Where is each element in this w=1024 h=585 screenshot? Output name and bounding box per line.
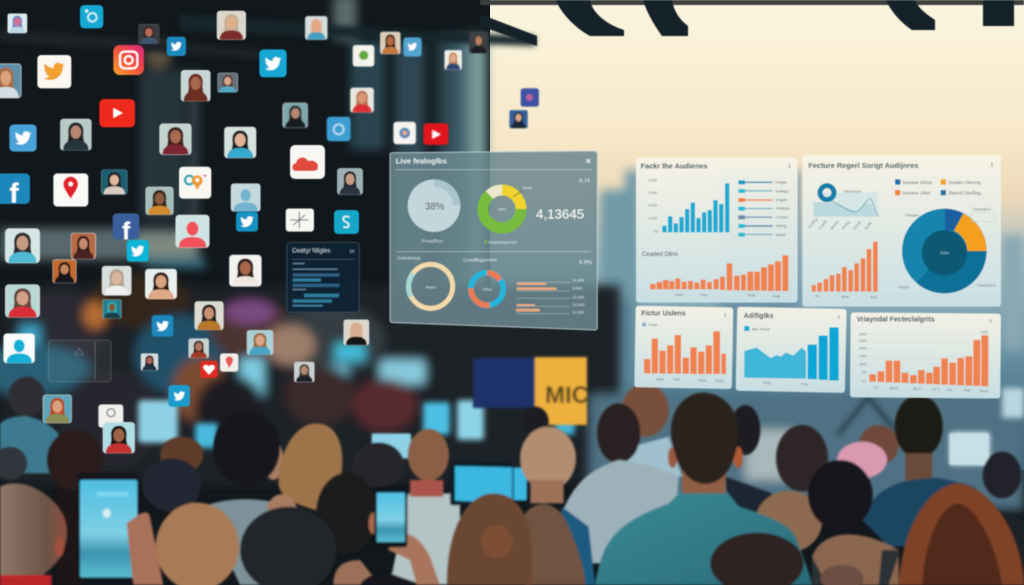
icon: facebook: f	[9, 178, 19, 209]
heading: Fecture Regerl Sorigt Audijnres	[808, 161, 918, 170]
subheading: Ceaded Dlins	[642, 252, 678, 258]
legend: Deestce Lihter	[903, 191, 931, 196]
avatar: white portrait	[229, 255, 261, 286]
panel: regional forecast: Bk 4	[913, 387, 921, 391]
panel: dark small table: Cealty/ Nligles	[292, 249, 330, 255]
icon: twitter blurred	[152, 315, 173, 337]
chart: green yellow donut	[483, 185, 532, 244]
icon: person red	[176, 215, 209, 248]
panel: social audiences: Po	[815, 294, 820, 298]
chart: area and ring: Sreffng	[808, 217, 818, 229]
panel: future users	[634, 306, 733, 389]
panel: regional forecast: 0m	[862, 371, 867, 375]
chart: blue bars	[648, 179, 729, 234]
panel: social audiences: 1	[990, 163, 993, 169]
avatar: red haired woman	[43, 395, 72, 423]
avatar: woman orange top	[146, 187, 173, 215]
avatar: orange haired	[247, 330, 273, 355]
legend: Ungde	[776, 180, 786, 184]
chart: horizontal bars: 12,001	[572, 294, 585, 299]
panel: future users: Pap	[673, 378, 680, 382]
panel: regional forecast: 4000	[859, 363, 867, 367]
avatar: orange portrait	[380, 32, 400, 54]
avatar: grey lab coat	[102, 266, 131, 295]
billboard sign in crowd: MIC	[545, 382, 589, 409]
legend: Ungoly	[776, 198, 787, 202]
panel: audience charts: Dsrls	[675, 293, 683, 297]
chart: pie donut: Data	[940, 250, 950, 255]
foreground crowd, left half	[0, 377, 532, 585]
legend	[738, 180, 790, 237]
panel: audience charts: Trap	[700, 293, 707, 297]
chart: horizontal bars: 12,001	[572, 310, 585, 315]
avatar: grey jacket	[337, 168, 363, 195]
avatar: woman red top	[160, 124, 191, 155]
icon: twitter lower	[168, 385, 190, 407]
avatar: blue silhouette	[231, 184, 260, 211]
chart: area and ring: Coreffs	[818, 219, 828, 231]
avatar: pale blur chip	[8, 14, 27, 33]
icon: orange bird on white	[37, 55, 71, 88]
chart: area and ring: Adlerscope	[843, 190, 862, 194]
chart: pie donut: Thescoders	[977, 284, 996, 288]
chart: area and ring: Plofng	[841, 220, 851, 231]
chart: big gauge: 38%	[425, 202, 445, 213]
panel: live analytics glass: 9.9%	[579, 260, 592, 266]
avatar: dark beam portrait	[469, 32, 488, 53]
avatar: man blue top	[224, 127, 256, 158]
chart: big gauge: Preadfhce	[422, 238, 443, 243]
icon: twitter cyan	[127, 240, 149, 262]
panel: regional forecast: 0000	[859, 339, 867, 343]
panel: future users: Plass	[648, 323, 657, 327]
panel: audience insights: 2	[837, 315, 840, 320]
avatar: small woman	[218, 73, 238, 92]
heading: Live fealoglbs	[396, 157, 447, 166]
avatar: man peach shirt	[145, 269, 177, 299]
avatar: man in glasses	[60, 119, 91, 150]
chart: blue orange donut	[471, 273, 503, 305]
legend: Dlascel Clacfhng	[948, 191, 981, 196]
icon: blue swirl	[327, 117, 351, 141]
chart: pie donut: Plclcte	[899, 285, 909, 289]
avatar: salmon portrait	[305, 16, 327, 40]
chart: pie donut: Fblssyte	[905, 213, 919, 217]
avatar: woman brown	[71, 233, 96, 259]
panel: future users: 2Day	[715, 379, 724, 383]
panel: regional forecast: Bupv	[980, 389, 989, 393]
chart: horizontal bars: 12,043	[572, 302, 585, 307]
group: icons upper left	[0, 5, 287, 215]
chart: orange bars	[869, 335, 988, 386]
avatar: cropped edge portrait	[0, 64, 21, 98]
panel: future users: 1	[724, 312, 727, 317]
chart: gridlines	[868, 334, 989, 382]
panel: live analytics glass: Conlolaraup	[397, 255, 421, 260]
icon: twitter	[236, 212, 258, 232]
panel: live analytics glass: Cnedfhgysnhre	[463, 257, 497, 263]
panel: audience insights	[736, 307, 847, 393]
panel: regional forecast: 1/1	[873, 386, 878, 390]
chart: area and ring	[808, 186, 878, 231]
icon: cyan s app	[334, 210, 359, 234]
panel: regional forecast: 1%	[947, 388, 953, 392]
avatar: small blue suit	[445, 50, 462, 70]
icon: twitter	[9, 124, 37, 152]
legend: Tylong	[776, 224, 786, 228]
foreground crowd, right half	[509, 383, 1024, 585]
panel: dark small table	[287, 242, 359, 312]
chart: horizontal bars: 0,000	[572, 286, 583, 291]
legend: Unsof	[776, 233, 786, 237]
chart: cream ring: Nwso	[426, 284, 436, 289]
avatar: man in suit	[344, 320, 369, 345]
panel: faint outlined widget	[48, 340, 111, 382]
panel: future users: Bfhe	[657, 378, 664, 382]
chart: pie donut: Thacinglfon	[972, 208, 991, 212]
icon: facebook	[0, 173, 30, 209]
panel: social audiences	[802, 155, 1001, 307]
avatar: woman long hair	[181, 70, 210, 101]
heading: Fackr lhe Audienes	[641, 162, 708, 171]
avatar: red shirt	[350, 88, 374, 112]
icon: youtube	[99, 99, 135, 127]
legend: C Ends	[776, 215, 788, 219]
avatar: dark small	[141, 354, 158, 370]
icon: red heart	[200, 361, 218, 378]
avatar: woman red shirt	[5, 285, 40, 317]
chart: green yellow donut: Engalrreglssnce	[488, 239, 518, 244]
panel: regional forecast: 1/1 z	[932, 388, 940, 392]
icon: map pin	[53, 173, 88, 207]
panel: regional forecast: 7000	[859, 354, 867, 358]
chart: horizontal bars: 11,004	[572, 278, 585, 283]
icon: youtube small	[423, 123, 448, 145]
icon: white red tag	[220, 353, 238, 372]
heading: Fictur Uslens	[641, 311, 686, 318]
chart: blue bars: 1.000	[648, 191, 657, 195]
billboard sign in crowd	[473, 357, 589, 425]
avatar: teal square portrait	[101, 170, 127, 194]
panel: regional forecast: 3750	[981, 330, 988, 334]
right dashboards	[634, 155, 1001, 399]
avatar: red dress	[189, 339, 209, 358]
avatar: dark portrait	[139, 24, 159, 44]
panel: dark small table: 1s	[350, 248, 354, 253]
chart: area and ring: Stomly	[830, 219, 840, 231]
panel: audience charts: Fbas	[747, 294, 756, 298]
panel: audience insights: Trns	[801, 383, 808, 387]
icon: pale blue	[403, 37, 422, 57]
panel: social audiences: Bhte	[842, 295, 849, 299]
chart: orange bars	[644, 331, 726, 374]
icon: cyan app	[80, 5, 103, 28]
icon: blue tile	[521, 88, 539, 107]
avatar: boy blue shirt	[5, 229, 40, 263]
legend: 4 Adinps	[776, 207, 790, 211]
group: icons upper centre	[283, 16, 539, 145]
hovering social media icons	[0, 5, 539, 453]
avatar: sunglasses man	[283, 103, 308, 128]
legend: Deasbe Cleenhg	[948, 180, 981, 185]
icon: facebook navy	[113, 213, 139, 245]
icon: user cyan on white	[4, 334, 35, 363]
panel: social audiences: Ban	[871, 296, 877, 300]
heading: Adifigtks	[744, 313, 774, 320]
panel: audience charts: 1	[788, 163, 791, 169]
chart: blue bars: 5.000	[648, 204, 657, 208]
icon: facebook navy: f	[122, 218, 131, 245]
chart: area and ring: Sorfly	[864, 221, 873, 231]
legend	[895, 179, 981, 196]
panel: regional forecast: 0+	[862, 379, 866, 383]
panel: audience insights: Phep	[763, 381, 771, 385]
avatar: teal blur	[103, 300, 121, 318]
chart: pie donut	[899, 208, 996, 293]
chart: orange bars	[812, 242, 878, 292]
panel: audience insights: Blnr Fluse	[752, 326, 771, 331]
background phones held up	[138, 388, 1024, 465]
panel: regional forecast: Biols	[890, 386, 898, 390]
panel: future users: Fbos	[698, 379, 707, 383]
panel: regional forecast	[850, 312, 1001, 399]
chart: green yellow donut: 84%	[498, 207, 506, 211]
icon: white plus	[286, 208, 314, 232]
icon: cloud on white	[290, 145, 325, 179]
chart: horizontal bars	[516, 278, 585, 315]
avatar: boy red top	[103, 422, 135, 453]
heading: Vriayndal Fecteclalgrits	[857, 316, 935, 323]
icon: instagram	[113, 45, 144, 75]
chart: blue bars: 0.000	[648, 179, 657, 183]
chart: cream ring	[408, 264, 453, 308]
legend: Deestae Shlinp	[903, 180, 933, 185]
big number: 4,13645	[536, 206, 584, 221]
avatar: woman orange backdrop	[53, 260, 76, 283]
icon: twitter cyan	[259, 49, 287, 77]
panel: live analytics glass: 9,74	[579, 178, 590, 184]
legend: Auflings	[776, 189, 789, 193]
panel: regional forecast: 0000	[859, 346, 867, 350]
panel: regional forecast: 0000	[859, 332, 867, 336]
panel: regional forecast: Plas	[963, 389, 971, 393]
panel: audience charts	[636, 157, 798, 303]
avatar: white outline	[98, 404, 123, 428]
icon: twitter blue	[167, 37, 186, 56]
chart: area and ring: Dlsofy	[852, 220, 862, 231]
chart: green yellow donut: Scale	[523, 186, 532, 190]
chart: blue bars: 0.0	[653, 230, 658, 234]
icon: white round logo	[393, 122, 416, 144]
chart: blue bars: 2.000	[648, 217, 657, 221]
panel: regional forecast: 2	[989, 319, 992, 324]
chart: orange bars	[650, 255, 788, 291]
avatar: red jacket man	[217, 11, 246, 40]
chart: area and bars	[744, 327, 839, 381]
avatar: grey dark jacket	[294, 362, 314, 382]
avatar: yellow scarf	[195, 301, 223, 330]
panel: audience charts: Arlig	[773, 294, 780, 298]
chart: big gauge	[408, 179, 460, 243]
panel: live analytics glass	[390, 151, 597, 330]
icon: white green	[353, 45, 374, 67]
icon: multicolour logo	[179, 167, 211, 199]
avatar: blue tile	[510, 110, 527, 128]
group: icons mid left	[4, 208, 369, 453]
chart: blue orange donut: Dflso	[483, 287, 493, 292]
blurred crowd in the distance	[0, 272, 1024, 510]
